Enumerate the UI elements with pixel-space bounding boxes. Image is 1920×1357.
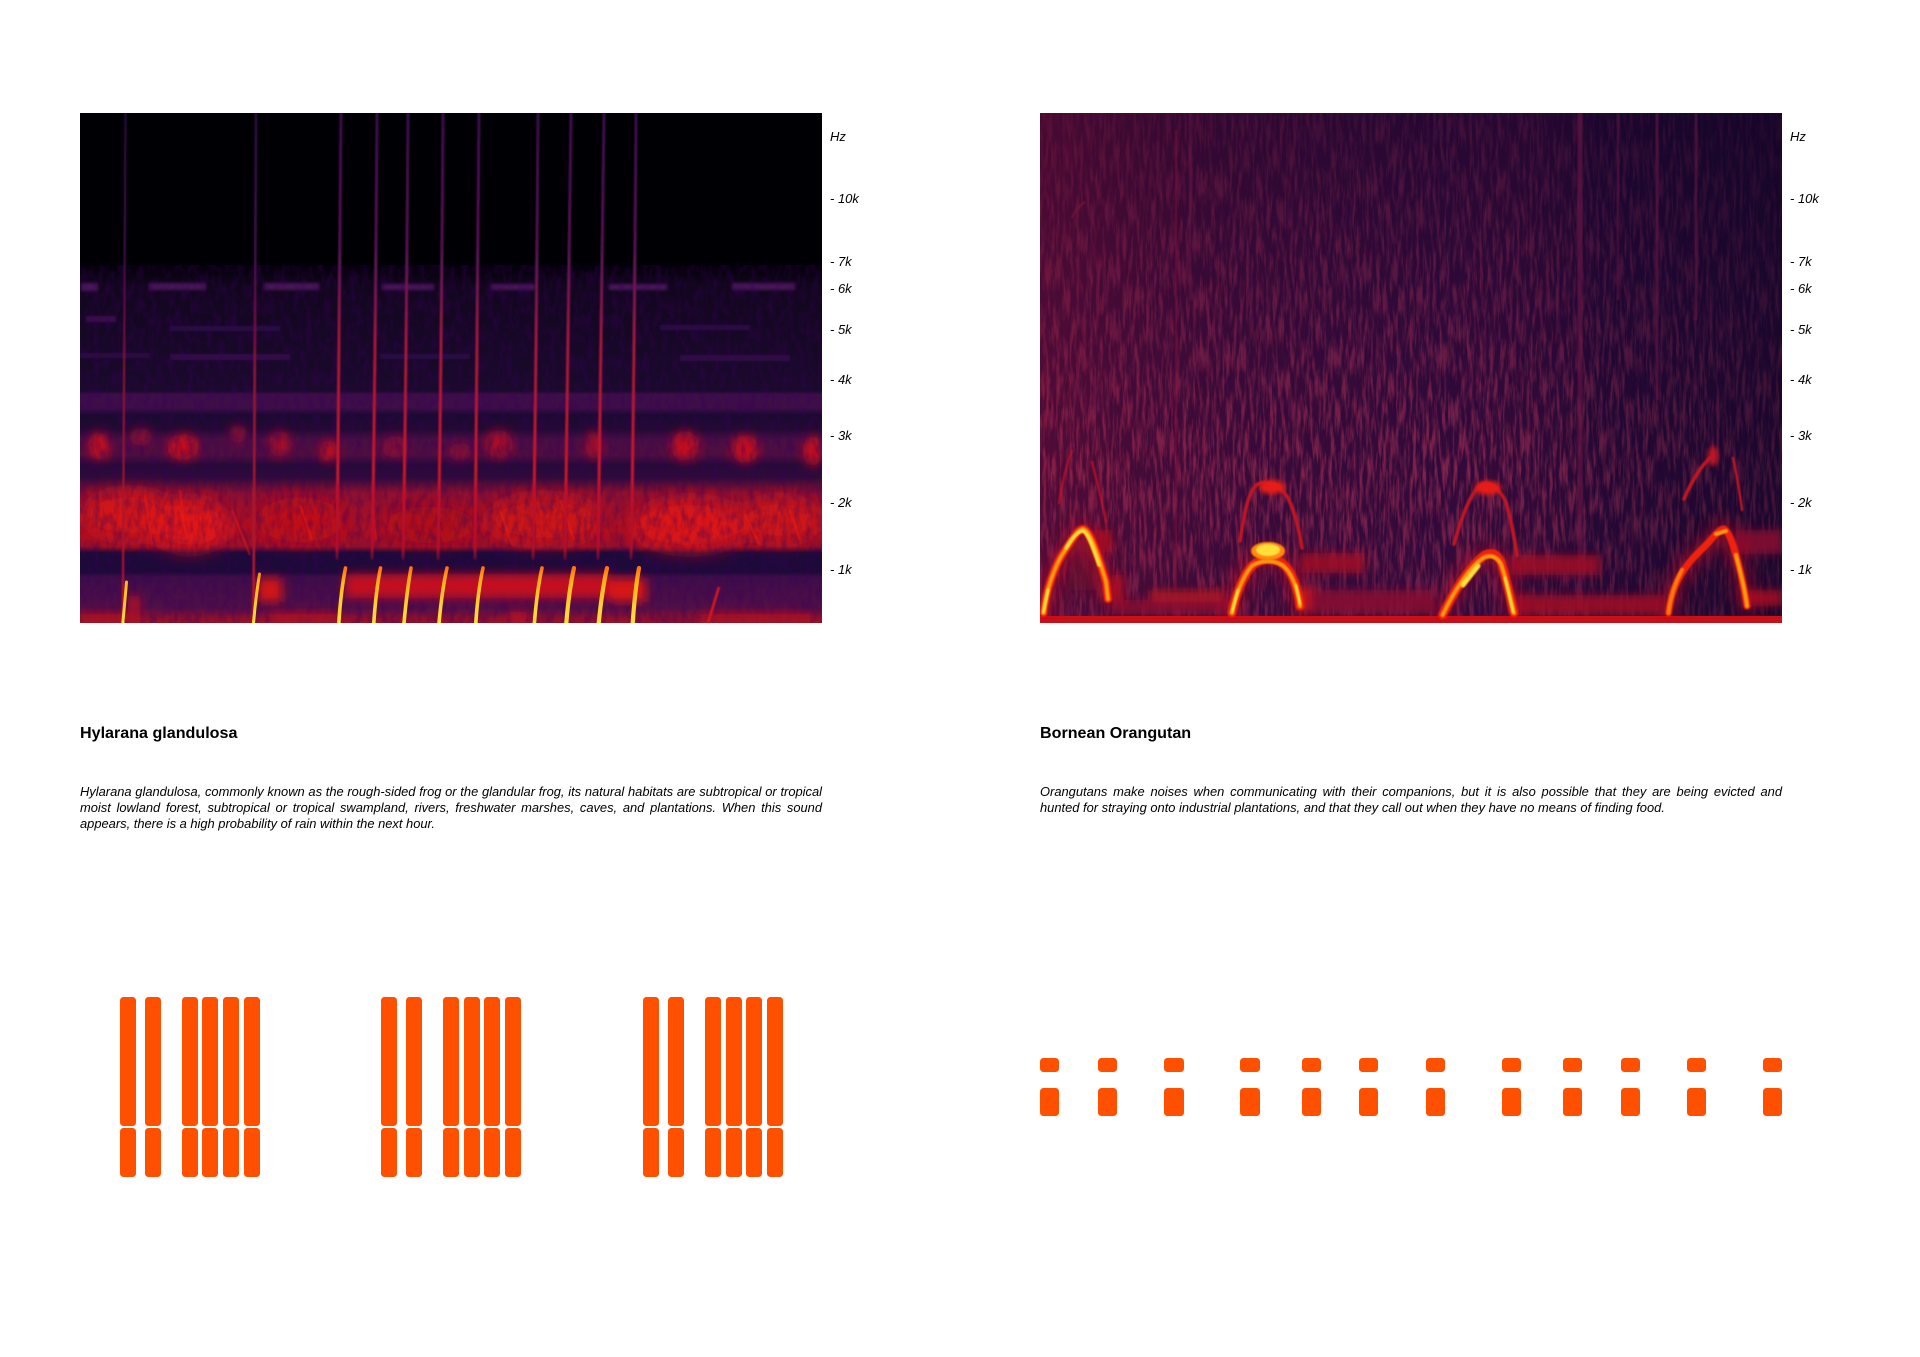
frequency axis: left spectrogram: - 7k <box>830 254 852 269</box>
frequency axis: left spectrogram: - 5k <box>830 322 852 337</box>
spectrogram background bands <box>80 113 822 623</box>
frequency axis: right spectrogram: - 3k <box>1790 428 1812 443</box>
yellow blob on second arc <box>1251 542 1285 560</box>
frequency axis: right spectrogram: - 7k <box>1790 254 1812 269</box>
slanted red streaks <box>145 490 800 555</box>
pattern group 3 <box>643 997 783 1177</box>
frequency axis: left spectrogram: - 3k <box>830 428 852 443</box>
frequency axis: right spectrogram: - 1k <box>1790 562 1812 577</box>
frog call vertical traces <box>123 113 719 623</box>
frequency axis: left spectrogram <box>830 129 860 577</box>
frequency axis: right spectrogram: - 10k <box>1790 191 1819 206</box>
frequency axis: left spectrogram: - 1k <box>830 562 852 577</box>
frequency axis: right spectrogram: - 5k <box>1790 322 1812 337</box>
frequency axis: right spectrogram <box>1790 129 1820 577</box>
pattern group 2 <box>381 997 521 1177</box>
text block: orangutan description <box>1040 784 1782 815</box>
panel: Bornean Orangutan spectrogram <box>1040 113 1782 623</box>
orangutan arcs <box>1044 529 1747 615</box>
text block: frog description: appears, there is a high probability of rain within the next hour. <box>80 816 435 831</box>
vertical noise texture <box>1040 113 1782 623</box>
panel: Hylarana glandulosa spectrogram <box>80 113 822 623</box>
background wash <box>1040 113 1782 623</box>
3k red blobs <box>88 425 823 466</box>
sustained low energy <box>1070 530 1782 615</box>
yellow hot spots <box>1044 531 1513 612</box>
2k red band <box>82 491 820 551</box>
text block: frog description <box>80 784 822 831</box>
frequency axis: left spectrogram: - 4k <box>830 372 852 387</box>
heading: Bornean Orangutan: Bornean Orangutan <box>1040 724 1191 742</box>
arc harmonics <box>1059 202 1742 555</box>
vertical streaks <box>1176 113 1696 610</box>
text block: frog description: moist lowland forest, subtropical or tropical swampland, rivers, freshwater marshes, caves, and plantations. When this sound <box>80 800 822 815</box>
frequency axis: left spectrogram: - 10k <box>830 191 859 206</box>
bottom line <box>1040 616 1782 623</box>
text block: frog description: Hylarana glandulosa, commonly known as the rough-sided frog or the glandular frog, its natural habitats are subtropical or tropical <box>80 784 822 799</box>
frequency axis: right spectrogram: - 4k <box>1790 372 1812 387</box>
rhythm pattern: orangutan calls <box>1040 1058 1782 1116</box>
chirp afterglow <box>80 574 810 624</box>
pattern group 1 <box>120 997 260 1177</box>
upper noise bands near 6k <box>80 283 795 361</box>
frequency axis: left spectrogram: - 2k <box>830 495 852 510</box>
arc glow <box>1044 529 1747 615</box>
heading: Hylarana glandulosa: Hylarana glandulosa <box>80 724 237 742</box>
frequency axis: right spectrogram: - 2k <box>1790 495 1812 510</box>
harmonic peaks <box>1259 446 1718 495</box>
frog call bright chirps <box>123 568 639 623</box>
texture noise <box>80 265 822 623</box>
frequency axis: left spectrogram: - 6k <box>830 281 852 296</box>
text block: orangutan description: hunted for straying onto industrial plantations, and that they call out when they have no means of finding food. <box>1040 800 1665 815</box>
frequency axis: right spectrogram: - 6k <box>1790 281 1812 296</box>
rhythm pattern: frog calls <box>120 997 783 1177</box>
frequency axis: right spectrogram: Hz <box>1790 129 1806 144</box>
frequency axis: left spectrogram: Hz <box>830 129 846 144</box>
text block: orangutan description: Orangutans make noises when communicating with their companions, but it is also possible that they are being evicted and <box>1040 784 1782 799</box>
